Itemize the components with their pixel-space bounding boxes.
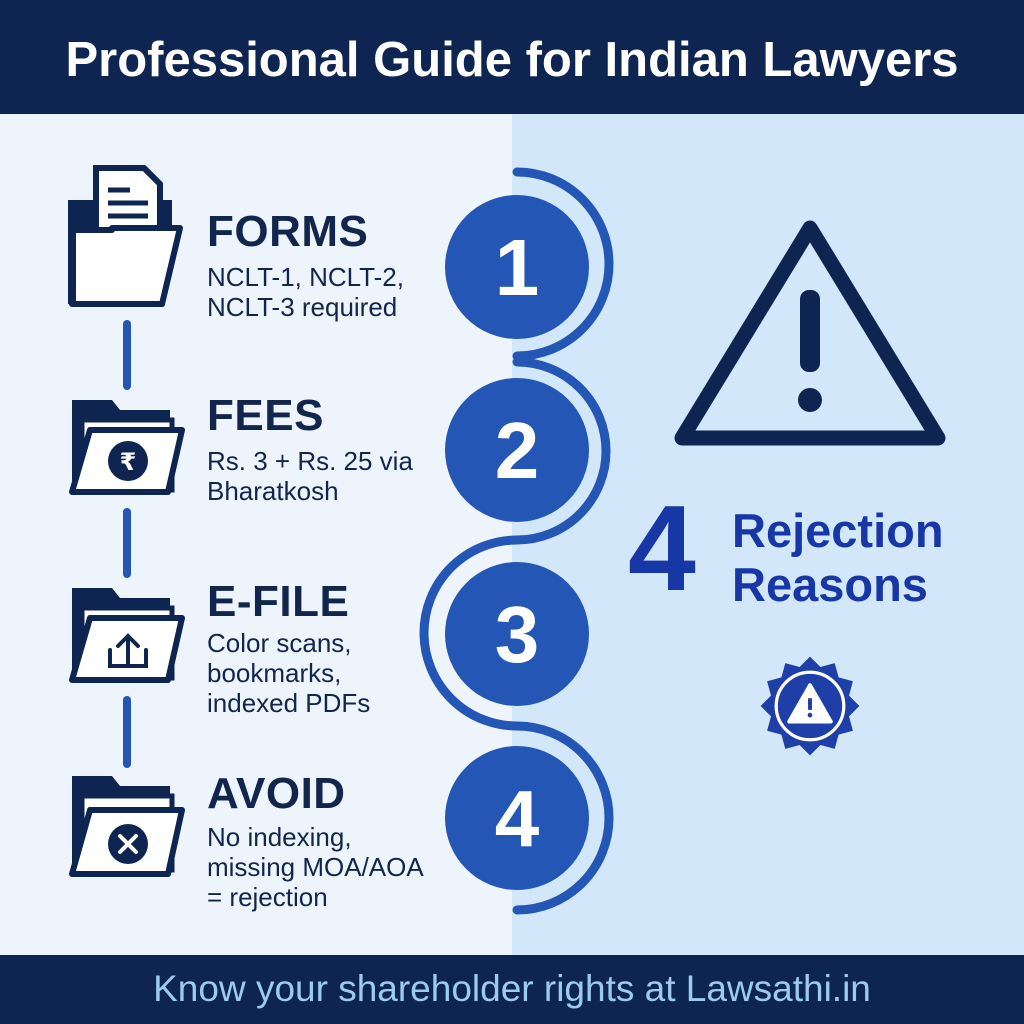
steps timeline: 3 (495, 590, 539, 679)
step 3 text: bookmarks, (207, 658, 341, 688)
step 4 text: missing MOA/AOA (207, 852, 424, 882)
curved path (424, 172, 609, 910)
icon: big warning triangle (682, 228, 938, 438)
icon: folder upload (72, 588, 182, 680)
icon: folder rupee: ₹ (120, 448, 136, 476)
header: Professional Guide for Indian Lawyers (65, 33, 959, 87)
icon: folder rupee (72, 400, 182, 492)
icon: folder reject (72, 776, 182, 874)
step 4 text (207, 769, 424, 912)
step 1 text: FORMS (207, 207, 368, 256)
step 2 text (207, 391, 413, 506)
connector lines (123, 324, 131, 764)
steps timeline: 4 (495, 774, 540, 863)
number circles (445, 195, 589, 890)
step 3 text: E-FILE (207, 577, 349, 626)
step 1 text: NCLT-3 required (207, 292, 397, 322)
step 2 text: FEES (207, 391, 324, 440)
footer: Know your shareholder rights at Lawsathi.in (153, 968, 871, 1009)
step 4 text: AVOID (207, 769, 346, 818)
icon: folder with document (72, 168, 180, 304)
step 4 text: No indexing, (207, 822, 352, 852)
steps timeline: 1 (495, 223, 539, 312)
steps timeline: 2 (495, 406, 539, 495)
step 1 text (207, 207, 404, 322)
icon: badge warning (761, 657, 859, 755)
step 3 text: indexed PDFs (207, 688, 370, 718)
step 4 text: = rejection (207, 882, 328, 912)
rejection reasons heading: Reasons (732, 558, 928, 611)
step 2 text: Bharatkosh (207, 476, 339, 506)
rejection reasons heading (628, 480, 944, 616)
step 3 text (207, 577, 370, 718)
step 3 text: Color scans, (207, 628, 352, 658)
footer (0, 955, 1024, 1024)
header (0, 0, 1024, 114)
step 1 text: NCLT-1, NCLT-2, (207, 262, 404, 292)
rejection reasons heading: 4 (628, 480, 696, 616)
rejection reasons heading: Rejection (732, 504, 944, 557)
step 2 text: Rs. 3 + Rs. 25 via (207, 446, 413, 476)
